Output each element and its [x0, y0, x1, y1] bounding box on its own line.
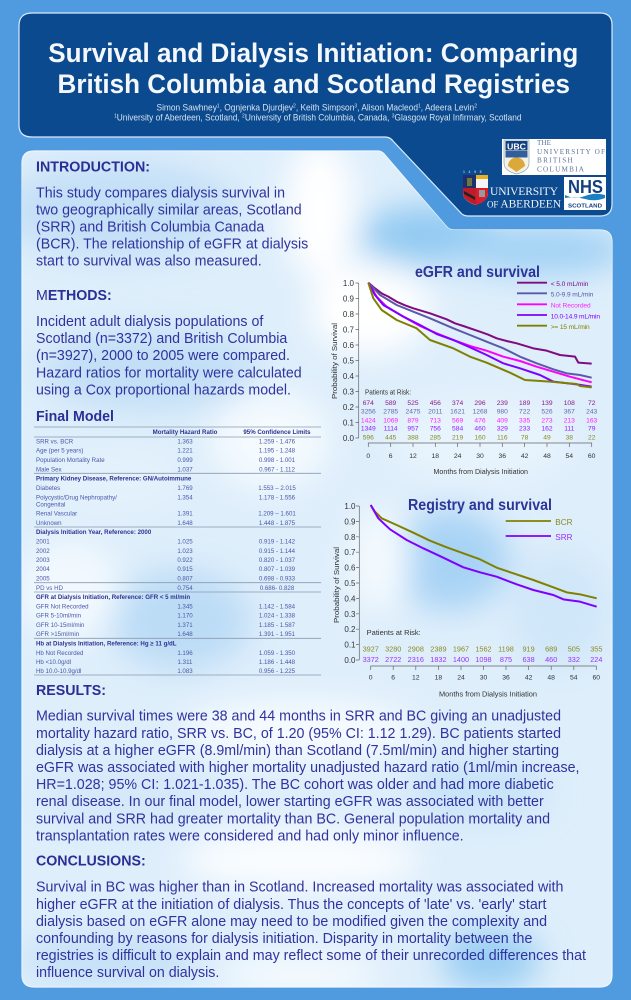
x axis: 36 [499, 453, 506, 460]
patients at risk: 476 [474, 417, 486, 424]
patients at risk: 367 [564, 409, 575, 416]
patients at risk: 919 [523, 644, 535, 654]
patients at risk: 224 [590, 655, 602, 664]
table: final model: 1.311 [178, 659, 193, 666]
y axis: 0.4 [344, 594, 356, 603]
heading: results: RESULTS: [36, 682, 106, 699]
table: final model: 0.820 - 1.037 [259, 557, 296, 564]
patients at risk: 2389 [430, 644, 447, 654]
table: final model: Diabetes [36, 485, 60, 492]
x axis: 60 [588, 453, 596, 460]
patients at risk: 1967 [453, 644, 469, 654]
patients at risk: 2785 [383, 409, 398, 416]
title [48, 38, 578, 99]
y axis: 0.4 [343, 372, 355, 381]
table: final model: 1.391 [177, 510, 193, 518]
x axis: 42 [521, 453, 529, 460]
affiliations: 3 [392, 114, 395, 120]
table: final model: Dialysis Initiation Year, Reference: 2000 [36, 529, 152, 536]
patients at risk: 505 [568, 644, 580, 654]
y axis: 0.5 [343, 356, 355, 366]
legend [506, 518, 573, 542]
legend: < 5.0 mL/min [551, 281, 589, 288]
table: final model: 1.059 - 1.350 [259, 650, 296, 657]
patients at risk: 189 [519, 400, 530, 407]
patients at risk: 674 [363, 400, 374, 407]
logo: University of British Columbia: BRITISH [537, 157, 573, 165]
patients at risk: 1349 [361, 426, 376, 433]
chart title: Registry and survival [408, 497, 552, 514]
patients at risk: 2908 [408, 644, 424, 654]
text: results body: HR=1.028; 95% CI: 1.021-1.035). The BC cohort was older and had more diabetic [36, 777, 554, 793]
patients at risk: 2475 [406, 409, 421, 416]
x axis: 54 [570, 674, 578, 682]
y axis: 0.8 [344, 533, 356, 542]
patients at risk: 49 [543, 434, 551, 441]
logo: University of British Columbia [502, 139, 606, 175]
patients at risk: 456 [430, 400, 441, 407]
panel: header [19, 13, 612, 216]
x axis: 30 [480, 674, 487, 682]
legend [517, 281, 600, 331]
y axis: 0.1 [343, 418, 355, 428]
patients at risk: 22 [588, 434, 596, 441]
patients at risk [363, 628, 602, 664]
patients at risk: 116 [497, 434, 508, 441]
x axis: 60 [593, 674, 600, 682]
text: results body: Median survival times were 38 and 44 months in SRR and BC giving an unadjusted [36, 709, 561, 725]
patients at risk: 1424 [361, 417, 376, 424]
y axis: 0.6 [344, 564, 356, 573]
text: results body: mortality hazard ratio, SRR vs. BC, of 1.20 (95% CI: 1.12 1.29). BC patients started [36, 726, 561, 742]
table: final model: 1.037 [177, 466, 193, 474]
table: final model: 1.345 [177, 604, 193, 610]
text: conclusions body: influence survival on dialysis. [36, 965, 219, 981]
table: final model: 1.221 [177, 448, 193, 455]
heading: final model: Final Model [36, 408, 114, 425]
patients at risk: Patients at Risk: [367, 628, 421, 637]
logo: University of British Columbia: UBC [507, 142, 526, 152]
legend: BCR [555, 518, 573, 527]
table: final model: 0.999 [177, 457, 193, 464]
table: final model: 0.915 - 1.144 [259, 548, 296, 555]
table: final model: 1.023 [177, 548, 193, 555]
patients at risk: 296 [474, 400, 486, 407]
y axis [332, 502, 359, 665]
table: final model: GFR 5-10ml/min [36, 612, 82, 620]
table: final model: Congenital [36, 502, 65, 508]
patients at risk: 875 [500, 655, 512, 664]
logo: University of Aberdeen: UNIVERSITY [490, 186, 559, 198]
x axis: 0 [369, 674, 373, 682]
patients at risk: 111 [564, 426, 575, 433]
affiliations: 1 [114, 114, 117, 120]
y axis: 0.0 [343, 434, 355, 443]
patients at risk: 2316 [408, 655, 424, 664]
patients at risk: 638 [523, 655, 535, 664]
table: final model: 1.209 – 1.601 [258, 510, 296, 518]
y axis: 0.2 [343, 403, 355, 412]
patients at risk: 243 [586, 409, 598, 416]
y axis: 0.7 [344, 548, 356, 557]
table: final model: 0.915 [177, 566, 193, 573]
patients at risk: 388 [407, 434, 419, 441]
x axis: 48 [547, 674, 555, 682]
patients at risk: 239 [497, 400, 508, 407]
table: final model: GFR at Dialysis Initiation, Reference: GFR < 5 ml/min [36, 594, 190, 601]
chart title: eGFR and survival [415, 264, 540, 281]
y axis: 1.0 [344, 502, 356, 511]
patients at risk: 3927 [363, 644, 379, 654]
patients at risk: 2011 [428, 409, 443, 416]
patients at risk: 273 [541, 417, 553, 424]
patients at risk: 1114 [384, 426, 398, 433]
x axis: 18 [435, 674, 442, 682]
table: final model: Polycystic/Drug Nephropathy/ [36, 494, 117, 502]
patients at risk: 72 [588, 400, 596, 407]
title: Survival and Dialysis Initiation: Comparing [48, 38, 578, 68]
patients at risk: 285 [430, 434, 441, 441]
patients at risk: 722 [519, 409, 530, 416]
patients at risk: 756 [430, 426, 441, 433]
table: final model: 1.648 [177, 520, 193, 527]
patients at risk: 163 [586, 417, 598, 424]
x axis: 24 [454, 453, 462, 460]
table: final model: 2005 [36, 576, 50, 582]
table: final model: Hb 10.0-10.9g/dl [36, 668, 81, 675]
authors: 1 [217, 104, 220, 110]
table: final model: Hb Not Recorded [36, 650, 84, 657]
patients at risk: 689 [545, 644, 557, 654]
patients at risk: Patients at Risk: [365, 388, 411, 396]
text: methods body [36, 314, 302, 398]
text: introduction body: This study compares dialysis survival in [36, 185, 285, 201]
y axis: 0.0 [344, 656, 356, 665]
logo: University of Aberdeen: OF ABERDEEN [487, 198, 562, 210]
patients at risk: 445 [385, 434, 397, 441]
table: final model: 1.024 - 1.338 [259, 612, 296, 620]
x axis: 6 [391, 674, 395, 682]
table: final model: 1.083 [177, 668, 193, 675]
text: conclusions body: registries is difficult to explain and may reflect some of their unrecorded differences that [36, 948, 586, 964]
logo: University of British Columbia: THE [537, 139, 552, 147]
table: final model: 0.698 - 0.933 [259, 576, 296, 582]
table: final model: Unknown [36, 520, 62, 527]
table: final model: 1.259 - 1.476 [259, 438, 296, 445]
authors: , Adeera Levin [421, 103, 474, 113]
y axis: 0.7 [343, 326, 355, 334]
authors: 2 [474, 104, 477, 110]
legend: 5.0-9.9 mL/min [551, 292, 594, 299]
x axis: 48 [543, 453, 551, 460]
x axis: 12 [409, 453, 417, 460]
text: conclusions body [36, 880, 586, 981]
survival curves [371, 505, 597, 607]
text: results body: transplantation rates were considered and had only minor influence. [36, 828, 464, 844]
table: final model: 0.922 [177, 557, 193, 564]
table: final model: 0.807 - 1.039 [259, 566, 296, 573]
table: final model: 1.371 [177, 622, 193, 629]
authors: 3 [354, 104, 357, 110]
table: final model: 1.196 [177, 650, 193, 657]
table: final model: 0.807 [177, 576, 193, 582]
text: methods body: Incident adult dialysis populations of [36, 314, 264, 330]
patients at risk: 1621 [450, 409, 465, 416]
affiliations: University of Aberdeen, Scotland, [117, 113, 242, 123]
text: results body: survival and SRR had greater mortality than BC. General population mortality and [36, 811, 550, 827]
table: final model: 1.025 [177, 538, 193, 546]
table: final model: 1.354 [177, 494, 193, 502]
table: final model: 2001 [36, 538, 50, 546]
patients at risk: 38 [566, 434, 573, 441]
table: final model: Primary Kidney Disease, Reference: GN/Autoimmune [36, 476, 192, 482]
table: final model: 0.686- 0.828 [260, 585, 295, 592]
logo: University of British Columbia: UNIVERSITY OF [537, 148, 605, 156]
y axis: 0.5 [344, 579, 356, 588]
legend: 10.0-14.9 mL/min [551, 313, 600, 320]
y axis: Probability of Survival [332, 547, 341, 623]
y axis: 1.0 [343, 279, 355, 288]
legend: SRR [555, 533, 573, 542]
table: final model: Population Mortality Rate [36, 457, 105, 464]
affiliations: 2 [242, 114, 245, 120]
table: final model: 1.170 [177, 612, 193, 620]
x axis: 18 [432, 453, 439, 460]
heading: introduction: INTRODUCTION: [36, 159, 150, 176]
table: final model: Hb at Dialysis Initiation, Reference: Hg ≥ 11 g/dL [36, 640, 177, 648]
patients at risk: 879 [407, 417, 419, 424]
text: methods body: Hazard ratios for mortality were calculated [36, 365, 302, 381]
patients at risk [361, 388, 598, 441]
patients at risk: 957 [407, 426, 419, 433]
patients at risk: 2722 [385, 655, 401, 664]
x axis: 12 [412, 674, 420, 682]
authors: , Ognjenka Djurdjev [220, 103, 293, 113]
table: final model: 2004 [36, 566, 50, 573]
table: final model: 2002 [36, 548, 50, 555]
x axis: 30 [476, 453, 484, 460]
logo: University of Aberdeen [463, 170, 562, 210]
y axis [330, 279, 359, 443]
table: final model: 0.998 - 1.001 [259, 457, 296, 464]
table: final model: 1.553 – 2.015 [258, 485, 296, 492]
x axis: 36 [502, 674, 510, 682]
logo: NHS Scotland: SCOTLAND [568, 204, 602, 210]
patients at risk: 1098 [475, 655, 492, 664]
patients at risk: 160 [474, 434, 486, 441]
table: final model: Mortality Hazard Ratio [153, 429, 218, 436]
text: introduction body [36, 185, 308, 270]
text: conclusions body: dialysis based on eGFR alone may need to be modified given the complexity and [36, 914, 547, 930]
heading: methods: METHODS: [36, 287, 112, 304]
text: introduction body: start to survival was also measured. [36, 254, 262, 270]
y axis: 0.2 [344, 625, 356, 634]
table: final model: Age (per 5 years) [36, 448, 83, 455]
logo: NHS Scotland: NHS [568, 177, 603, 197]
title: British Columbia and Scotland Registries [58, 69, 570, 99]
patients at risk: 460 [545, 655, 557, 664]
y axis: 0.6 [343, 341, 355, 350]
text: methods body: using a Cox proportional hazards model. [36, 382, 291, 398]
authors: 2 [293, 104, 296, 110]
table: final model: 1.769 [177, 485, 193, 492]
table: final model: 0.967 - 1.112 [259, 466, 295, 474]
patients at risk: 108 [564, 400, 575, 407]
x axis: 0 [366, 453, 370, 460]
patients at risk: 1069 [383, 417, 398, 424]
y axis: 0.9 [344, 517, 356, 526]
patients at risk: 713 [430, 417, 441, 424]
text: results body: dialysis at a higher eGFR (8.9ml/min) than Scotland (7.5ml/min) and higher starting [36, 743, 559, 759]
table: final model: 1.391 - 1.951 [259, 631, 296, 638]
legend: Not Recorded [551, 303, 591, 310]
heading: conclusions: CONCLUSIONS: [36, 853, 146, 870]
x axis: 6 [389, 453, 393, 460]
x axis: 24 [457, 674, 465, 682]
patients at risk: 329 [497, 426, 508, 433]
table: final model: GFR >15ml/min [36, 631, 80, 638]
patients at risk: 162 [541, 426, 553, 433]
table: final model: Renal Vascular [36, 510, 77, 518]
patients at risk: 1268 [473, 409, 488, 416]
table: final model: GFR 10-15ml/min [36, 622, 85, 629]
text: methods body: (n=3927), 2000 to 2005 were compared. [36, 348, 290, 364]
y axis: 0.8 [343, 310, 355, 319]
legend: >= 15 mL/min [551, 324, 590, 331]
patients at risk: 332 [568, 655, 580, 664]
logo: University of British Columbia: COLUMBIA [537, 165, 585, 173]
logo: University of Aberdeen: 1495 [463, 170, 485, 174]
table: final model: 0.754 [177, 585, 193, 592]
patients at risk: 525 [407, 400, 419, 407]
x axis: Months from Dialysis Initiation [434, 467, 528, 476]
table: final model: 1.195 - 1.248 [259, 448, 296, 455]
section: conclusions [36, 853, 586, 981]
text: results body: eGFR was associated with higher mortality unadjusted hazard ratio (1ml/min increase, [36, 760, 580, 776]
survival curves [368, 283, 592, 387]
table: final model: Hb <10.0g/dl [36, 659, 71, 666]
section: results [36, 682, 580, 844]
patients at risk: 213 [564, 417, 575, 424]
table: final model: 0.956 - 1.225 [259, 668, 296, 675]
table: final model: 1.185 - 1.587 [259, 622, 296, 629]
table: final model [34, 427, 321, 675]
authors: , Keith Simpson [296, 103, 354, 113]
patients at risk: 596 [363, 434, 374, 441]
patients at risk: 589 [385, 400, 397, 407]
y axis: 0.9 [343, 294, 355, 304]
table: final model: 0.919 - 1.142 [259, 538, 296, 546]
affiliations: University of British Columbia, Canada, [245, 113, 392, 123]
x axis [366, 443, 596, 476]
patients at risk: 233 [519, 426, 530, 433]
patients at risk: 79 [588, 426, 596, 433]
table: final model: Male Sex [36, 466, 62, 474]
patients at risk: 355 [590, 644, 602, 654]
table: final model: 1.363 [177, 438, 193, 445]
logo: NHS Scotland [564, 177, 606, 210]
patients at risk: 460 [474, 426, 486, 433]
y axis: 0.1 [344, 641, 356, 650]
patients at risk: 3256 [361, 409, 376, 416]
patients at risk: 980 [497, 409, 508, 416]
patients at risk: 374 [452, 400, 463, 407]
text: conclusions body: higher eGFR at the initiation of dialysis. Thus the concepts of 'late' vs. 'early' start [36, 897, 546, 913]
chart: registry and survival [332, 497, 602, 698]
table: final model: PD vs HD [36, 585, 64, 592]
x axis: 54 [566, 453, 573, 460]
table: final model: 1.448 - 1.875 [259, 520, 296, 527]
x axis: Months from Dialysis Initiation [439, 690, 537, 698]
patients at risk: 526 [541, 409, 553, 416]
x axis [369, 666, 600, 698]
patients at risk: 1562 [475, 644, 492, 654]
text: methods body: Scotland (n=3372) and British Columbia [36, 331, 288, 347]
section: introduction [36, 159, 308, 270]
patients at risk: 335 [519, 417, 530, 424]
patients at risk: 3280 [385, 644, 401, 654]
table: final model: GFR Not Recorded [36, 604, 89, 610]
authors: , Alison Macleod [357, 103, 418, 113]
text: conclusions body: Survival in BC was higher than in Scotland. Increased mortality was associated with [36, 880, 563, 896]
table: final model: 1.648 [177, 631, 193, 638]
patients at risk: 1400 [453, 655, 469, 664]
table: final model: 95% Confidence Limits [243, 429, 311, 436]
section: methods [36, 287, 302, 398]
patients at risk: 1832 [430, 655, 447, 664]
patients at risk: 139 [541, 400, 553, 407]
text: conclusions body: confounding by reasons for dialysis initiation. Disparity in mortality between the [36, 931, 532, 947]
text: introduction body: two geographically similar areas, Scotland [36, 202, 302, 218]
chart: eGFR and survival [330, 264, 600, 476]
y axis: Probability of Survival [330, 323, 339, 399]
patients at risk: 78 [521, 434, 529, 441]
y axis: 0.3 [344, 610, 356, 619]
authors: 1 [418, 104, 421, 110]
x axis: 42 [525, 674, 533, 682]
text: introduction body: (BCR). The relationship of eGFR at dialysis [36, 237, 308, 253]
table: final model: SRR vs. BCR [36, 438, 74, 445]
table: final model: 1.186 - 1.448 [259, 659, 296, 666]
text: introduction body: (SRR) and British Columbia Canada [36, 220, 265, 236]
text: results body [36, 709, 580, 844]
table: final model: 1.142 - 1.584 [259, 604, 296, 610]
text: results body: renal disease. In our final model, lower starting eGFR was associated with better [36, 794, 544, 810]
table: final model: 2003 [36, 557, 50, 564]
patients at risk: 584 [452, 426, 463, 433]
patients at risk: 1198 [498, 644, 514, 654]
y axis: 0.3 [343, 388, 355, 396]
affiliations: Glasgow Royal Infirmary, Scotland [395, 113, 522, 123]
patients at risk: 3372 [363, 655, 379, 664]
patients at risk: 219 [452, 434, 463, 441]
authors: Simon Sawhney [156, 103, 223, 113]
patients at risk: 569 [452, 417, 463, 424]
patients at risk: 409 [497, 417, 508, 424]
table: final model: 1.178 - 1.556 [259, 494, 296, 502]
